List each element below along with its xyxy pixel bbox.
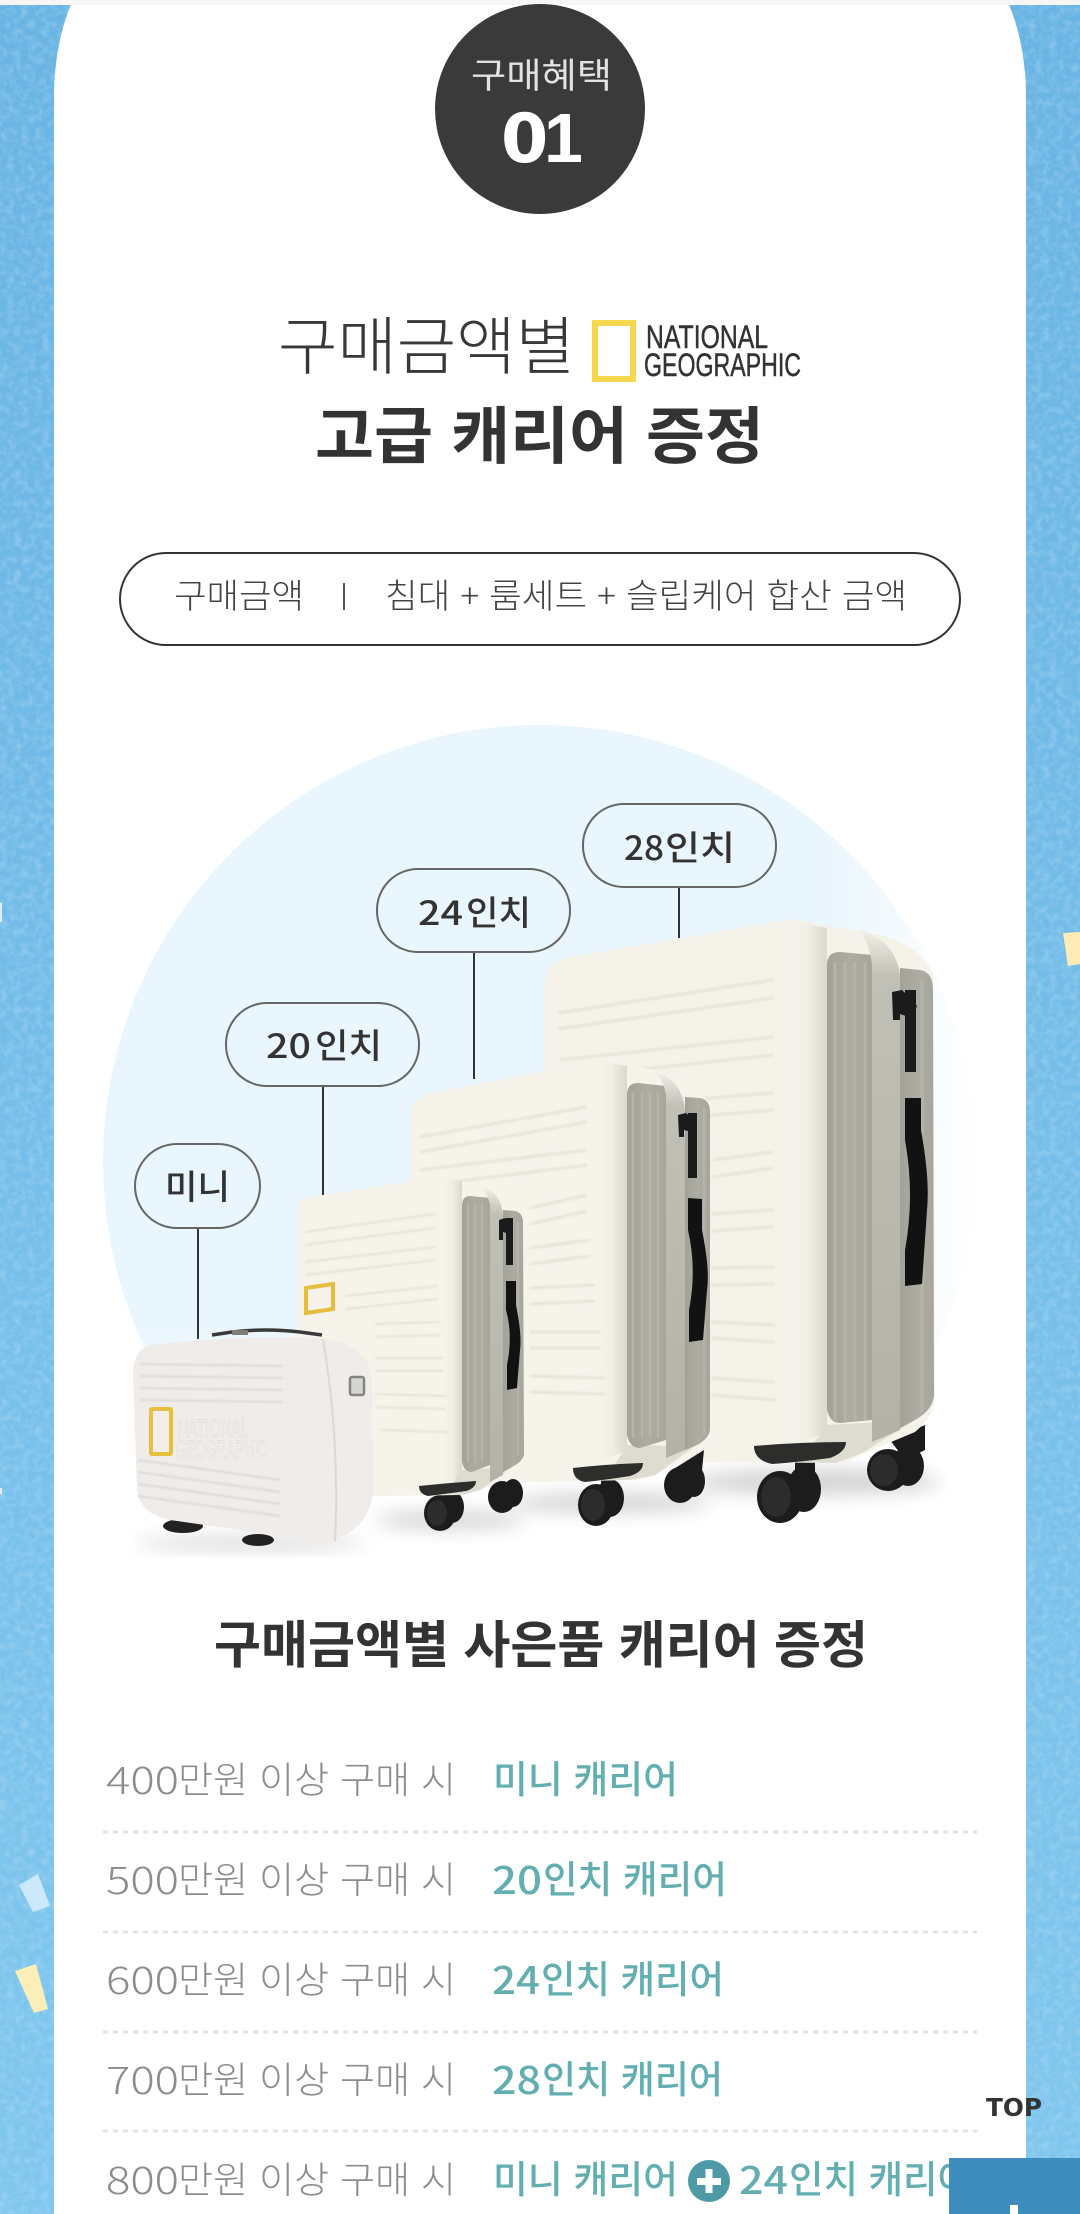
zipper lock <box>678 1113 697 1178</box>
label lines <box>198 887 679 1339</box>
gift table <box>103 1749 977 2205</box>
pill: purchase amount note: 침대 + 룸세트 + 슬립케어 합산 금액 <box>385 569 907 618</box>
TOP button label: TOP <box>986 2093 1042 2122</box>
row: 800: 800 <box>106 2151 179 2205</box>
fender <box>419 1481 476 1496</box>
size label: 28 inch: 28 <box>624 822 664 870</box>
handle <box>688 1198 708 1342</box>
row: 500 <box>106 1849 727 1905</box>
size label: 28 inch: 인치 <box>665 821 735 870</box>
row: 600: 600 <box>106 1951 179 2005</box>
zipper lock <box>892 990 917 1072</box>
size label: 28 inch <box>583 804 776 887</box>
ribbed side panels <box>462 1196 490 1472</box>
row: 700 <box>106 2049 723 2105</box>
suitcase: 20 inch <box>297 1178 525 1531</box>
handle <box>905 1098 928 1286</box>
floating blue button <box>949 2158 1080 2214</box>
suitcase: 28 inch <box>545 920 935 1523</box>
size label: 20 inch: 인치 <box>315 1019 382 1068</box>
size label: 20 inch <box>226 1003 419 1086</box>
size label: 20 inch: 20 <box>266 1020 311 1068</box>
icon: National Geographic logo: GEOGRAPHIC <box>644 347 801 383</box>
badge: benefit 01: 구매혜택 <box>471 48 612 99</box>
badge: benefit 01: 0 <box>501 100 548 179</box>
row: 400: 400 <box>106 1751 179 1805</box>
row: 800 <box>106 2149 972 2205</box>
wheels <box>578 1450 705 1526</box>
row: 700: 인치 캐리어 <box>542 2049 723 2104</box>
fender <box>754 1442 846 1464</box>
row: 700: 만원 이상 구매 시 <box>178 2050 456 2104</box>
zipper lock <box>499 1218 513 1265</box>
front ridges <box>558 980 775 1400</box>
size label: 24 inch: 24 <box>418 887 463 935</box>
title line: by purchase amount + National Geographic logo <box>278 297 801 388</box>
ribbed side panels <box>827 952 872 1423</box>
row: 500: 20 <box>492 1850 542 1905</box>
row: 500: 만원 이상 구매 시 <box>178 1850 456 1904</box>
row: 600: 인치 캐리어 <box>541 1949 724 2004</box>
icon: National Geographic logo <box>595 319 801 383</box>
pill: purchase amount note <box>120 553 960 645</box>
row: 700: 700 <box>106 2051 179 2105</box>
row: 600 <box>106 1949 724 2005</box>
row: 400: 미니 캐리어 <box>493 1749 678 1804</box>
fender <box>573 1463 643 1482</box>
icon: National Geographic logo: NATIONAL <box>646 319 768 355</box>
badge: benefit 01 <box>435 4 645 214</box>
size label: 24 inch <box>377 869 570 952</box>
confetti pieces <box>0 903 1080 2013</box>
size label: mini: 미니 <box>165 1160 230 1209</box>
top strip <box>0 0 1080 5</box>
icon: buckle <box>350 1377 364 1395</box>
pill: purchase amount note: 구매금액 <box>174 569 304 618</box>
suitcase: mini: NATIONAL <box>177 1415 249 1443</box>
badge: benefit 01: 1 <box>544 99 583 177</box>
suitcase: mini: GEOGRAPHIC <box>176 1436 267 1464</box>
ground shadows <box>135 1469 940 1549</box>
suitcase: mini <box>133 1330 373 1546</box>
size label: 24 inch: 인치 <box>466 886 531 935</box>
row: 400: 만원 이상 구매 시 <box>178 1750 456 1804</box>
front ridges <box>420 1107 605 1394</box>
section heading: 구매금액별 사은품 캐리어 증정 <box>214 1604 868 1678</box>
icon: yellow logo on mini <box>151 1409 171 1454</box>
row: 500: 인치 캐리어 <box>543 1849 727 1904</box>
size label: mini <box>135 1144 260 1228</box>
row: 700: 28 <box>492 2050 541 2105</box>
row: 600: 24 <box>492 1950 540 2005</box>
title line: by purchase amount + National Geographic logo: 구매금액별 <box>278 297 575 388</box>
row: 800: 24 <box>739 2150 788 2205</box>
row: 600: 만원 이상 구매 시 <box>178 1950 456 2004</box>
row: 800: 인치 캐리어 <box>789 2149 972 2204</box>
handle <box>506 1281 520 1390</box>
row: 400 <box>106 1749 678 1805</box>
row: 500: 500 <box>106 1851 179 1905</box>
ribbed side panels <box>627 1083 666 1448</box>
light blue background circle <box>103 725 980 1599</box>
title line: premium carrier gift: 고급 캐리어 증정 <box>315 386 764 476</box>
icon: yellow logo frame <box>306 1284 333 1313</box>
front ridges <box>305 1214 448 1432</box>
row: 800: 만원 이상 구매 시 <box>178 2150 456 2204</box>
row: 800: 미니 캐리어 <box>493 2149 678 2204</box>
suitcase: 24 inch <box>410 1060 711 1526</box>
wheels <box>424 1479 523 1531</box>
wheels <box>757 1425 925 1523</box>
icon: plus <box>688 2160 730 2202</box>
